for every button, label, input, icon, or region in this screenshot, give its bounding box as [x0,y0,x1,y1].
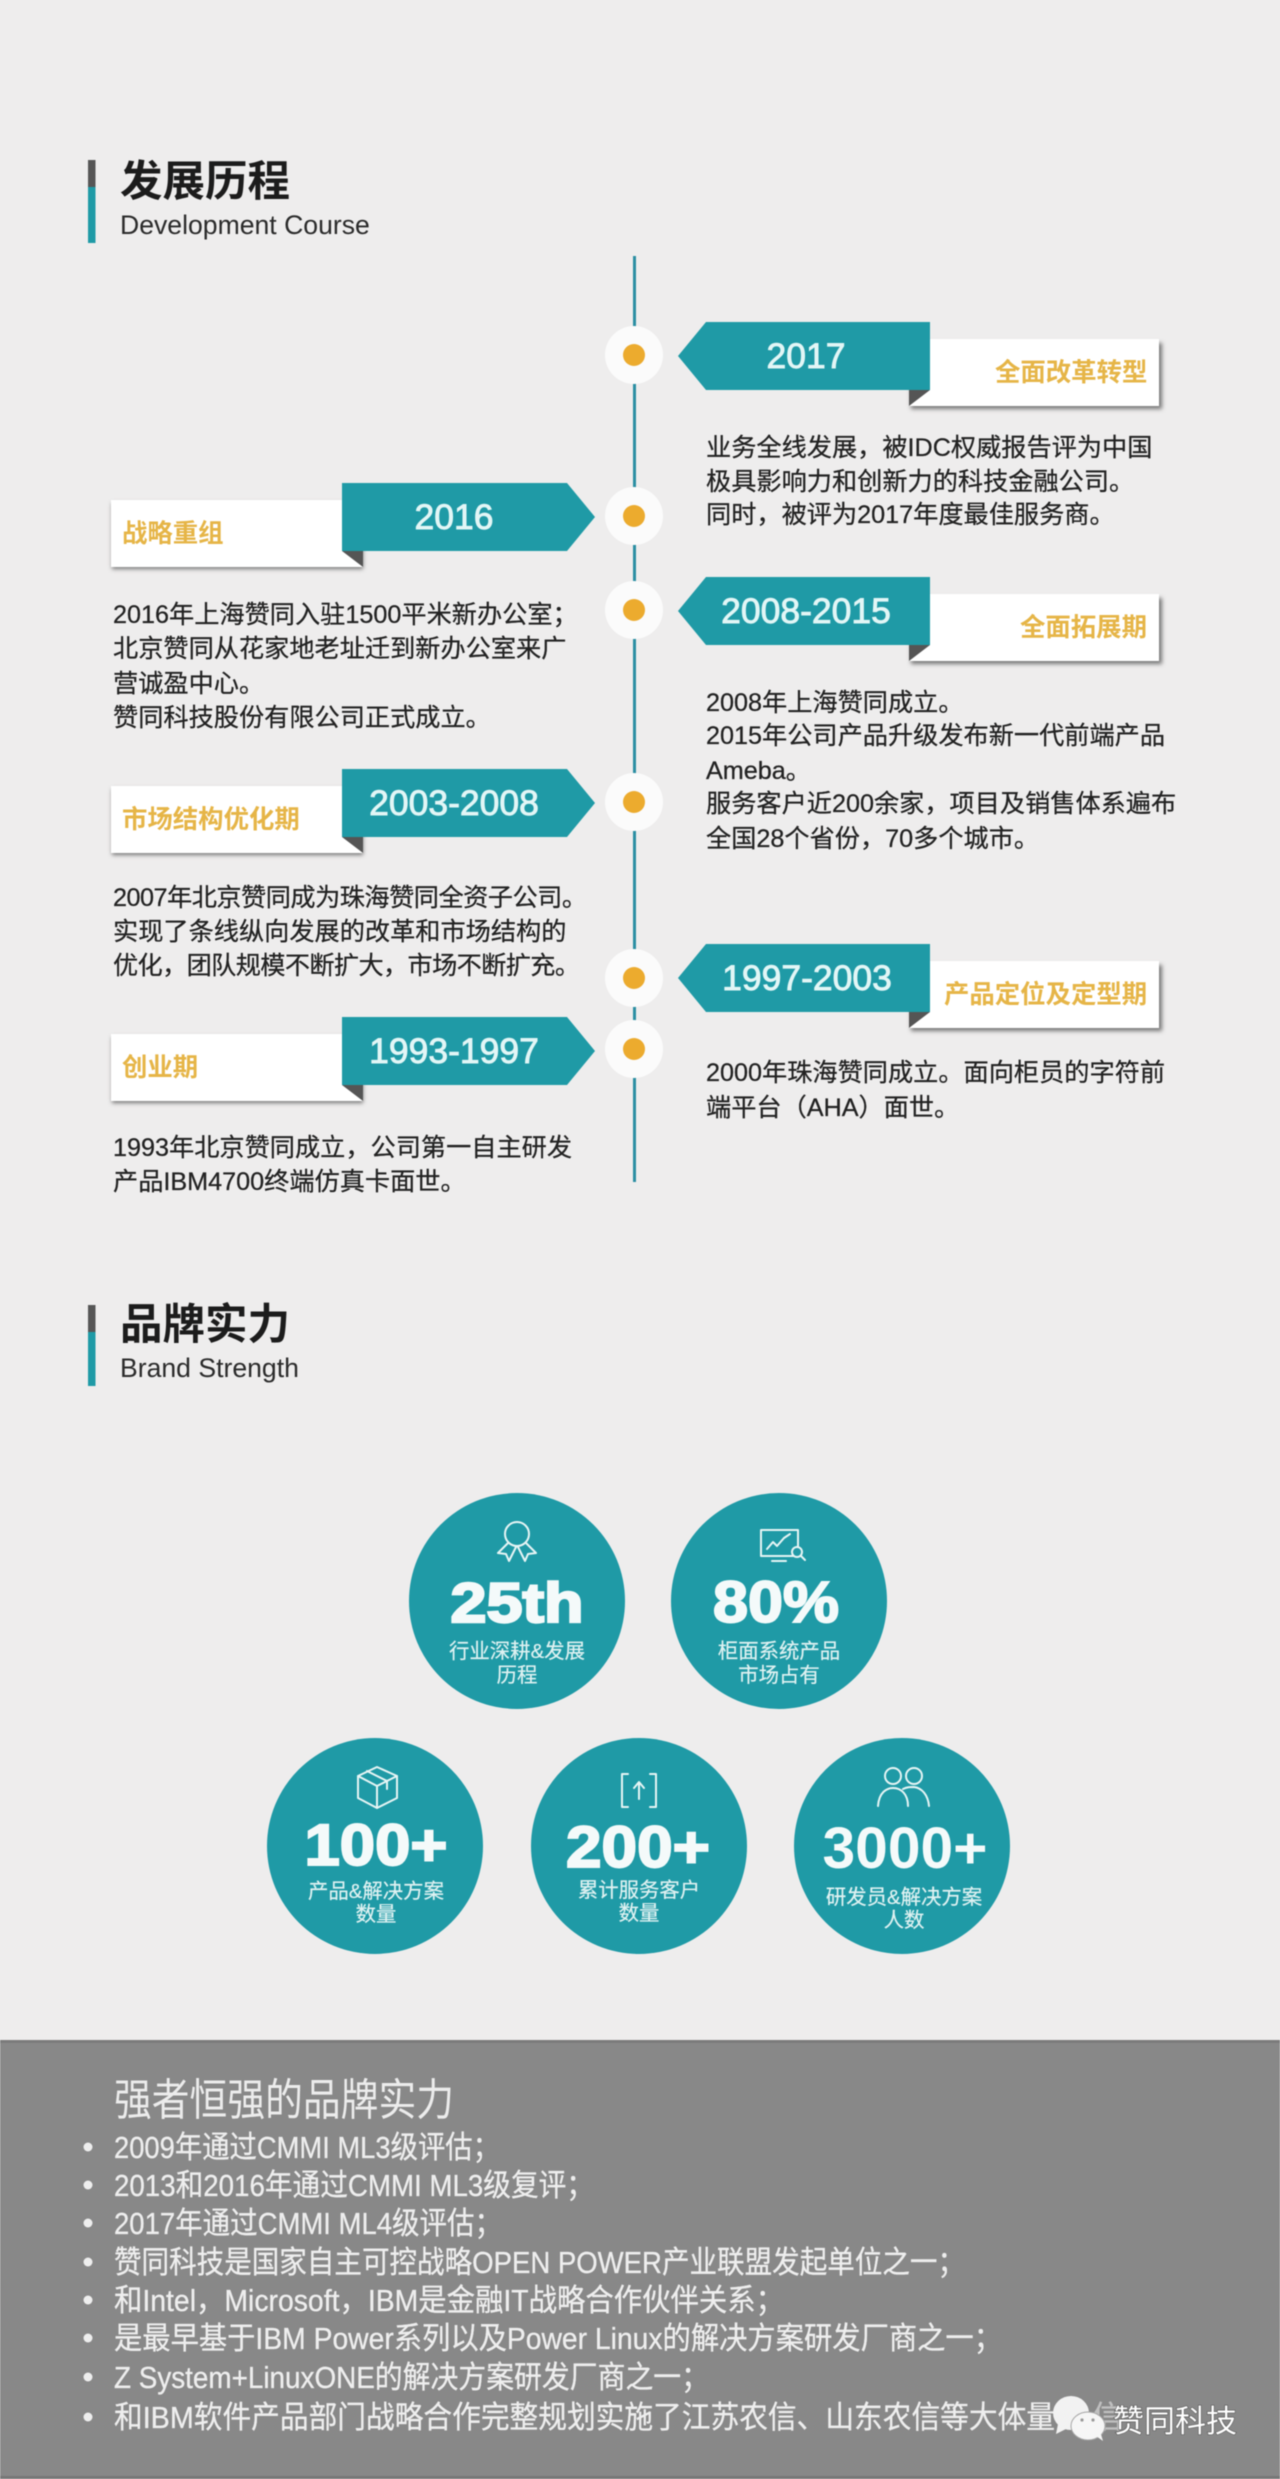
heading: 品牌实力: 品牌实力 [120,1302,290,1349]
text: 1993-1997 description: 1993年北京赞同成立，公司第一自主研发 [113,1134,572,1162]
ribbon: 2008-2015 全面拓展期: 2008-2015 [721,591,891,631]
heading: 发展历程 [88,159,370,243]
stat circle: 100+ [267,1738,483,1954]
ribbon: 1997-2003 产品定位及定型期: 产品定位及定型期 [944,980,1147,1009]
stat circle: 3000+: 3000+ [822,1816,988,1881]
text: 1997-2003 description [706,1059,1165,1122]
stat circle: 3000+: 研发员&解决方案 [826,1886,982,1909]
text: 2017 description [706,434,1152,529]
text: 2008-2015 description: 服务客户近200余家，项目及销售体系遍布 [706,790,1176,818]
text: 2016 description: 2016年上海赞同入驻1500平米新办公室； [113,601,578,629]
timeline node 1997-2003 [605,949,663,1007]
stat circle: 200+: 200+ [566,1815,710,1880]
list items: Z System+LinuxONE的解决方案研发厂商之一； [114,2360,709,2395]
ribbon: 2017 全面改革转型: 全面改革转型 [995,359,1147,387]
timeline axis [633,256,636,1182]
icon: monitor chart with magnifier [761,1530,805,1561]
ribbon: 1997-2003 产品定位及定型期: 1997-2003 [722,958,892,998]
list items: 2017年通过CMMI ML4级评估； [114,2206,502,2241]
text: 2017 description: 极具影响力和创新力的科技金融公司。 [706,468,1134,496]
heading: 发展历程: Development Course [120,210,370,240]
text: 2003-2008 description: 优化，团队规模不断扩大，市场不断扩充。 [113,952,580,980]
stat circle: 100+: 产品&解决方案 [308,1880,444,1903]
icon: upload bracket [622,1774,656,1807]
ribbon: 2003-2008 市场结构优化期: 2003-2008 [369,783,539,823]
stat circle: 80%: 市场占有 [738,1664,820,1687]
ribbon: 1993-1997 创业期 [111,1017,595,1103]
ribbon: 1993-1997 创业期: 1993-1997 [369,1031,539,1071]
stat circle: 80%: 柜面系统产品 [718,1640,840,1663]
stat circle: 200+: 累计服务客户 [578,1879,700,1902]
text: 1997-2003 description: 2000年珠海赞同成立。面向柜员的字符前 [706,1059,1165,1087]
text: 1993-1997 description: 产品IBM4700终端仿真卡面世。 [113,1168,466,1196]
icon: medal [498,1522,536,1561]
text: 2016 description: 营诚盈中心。 [113,670,264,698]
text: 2008-2015 description: Ameba。 [706,757,811,785]
stat circle: 3000+ [794,1738,1010,1954]
list items: 信 [1092,2400,1123,2435]
list items: 赞同科技是国家自主可控战略OPEN POWER产业联盟发起单位之一； [114,2245,965,2280]
text: 2016 description: 北京赞同从花家地老址迁到新办公室来广 [113,635,566,663]
text: 2008-2015 description [706,689,1176,853]
timeline node 2017 [605,326,663,384]
ribbon: 2017 全面改革转型 [678,322,1162,409]
timeline node 1993-1997 [605,1020,663,1078]
ribbon: 2016 战略重组 [111,483,595,569]
stat circle: 25th [409,1493,625,1709]
list items [84,2130,1123,2435]
ribbon: 2003-2008 市场结构优化期: 市场结构优化期 [122,806,300,834]
stat circle: 25th: 历程 [497,1664,537,1687]
heading: 品牌实力 [88,1302,299,1386]
icon: people [878,1768,929,1806]
list items: 2009年通过CMMI ML3级评估； [114,2130,500,2165]
panel title: 强者恒强的品牌实力 [114,2076,454,2125]
stat circle: 200+: 数量 [619,1902,659,1925]
panel: brand strength list [0,2040,1280,2479]
text: 2017 description: 同时，被评为2017年度最佳服务商。 [706,501,1115,529]
stat circle: 3000+: 人数 [884,1909,924,1932]
text: 2008-2015 description: 2008年上海赞同成立。 [706,689,964,717]
list items: 是最早基于IBM Power系列以及Power Linux的解决方案研发厂商之一； [114,2321,1002,2356]
text: 1997-2003 description: 端平台（AHA）面世。 [706,1094,959,1122]
stat circle: 100+: 数量 [356,1903,396,1926]
text: 1993-1997 description [113,1134,572,1196]
ribbon: 2008-2015 全面拓展期: 全面拓展期 [1020,614,1147,642]
watermark: wechat logo and name [1053,2396,1237,2441]
text: 2008-2015 description: 2015年公司产品升级发布新一代前端产品 [706,722,1165,750]
text: 2003-2008 description: 实现了条线纵向发展的改革和市场结构的 [113,918,566,946]
ribbon: 2016 战略重组: 战略重组 [122,520,224,548]
timeline node 2008-2015 [605,581,663,639]
text: 2016 description [113,601,578,732]
text: 2003-2008 description [113,884,587,980]
list items: 和IBM软件产品部门战略合作完整规划实施了江苏农信、山东农信等大体量 [114,2400,1055,2435]
icon: box [358,1767,397,1808]
ribbon: 1997-2003 产品定位及定型期 [678,944,1162,1031]
stat circle: 80%: 80% [713,1570,839,1635]
stat circle: 25th: 25th [450,1571,584,1634]
watermark: wechat logo and name: 赞同科技 [1113,2404,1237,2439]
heading: 品牌实力: Brand Strength [120,1353,299,1383]
list items: 2013和2016年通过CMMI ML3级复评； [114,2168,594,2203]
ribbon: 2017 全面改革转型: 2017 [767,336,845,376]
timeline node 2003-2008 [605,773,663,831]
ribbon: 2016 战略重组: 2016 [415,497,493,537]
ribbon: 2008-2015 全面拓展期 [678,577,1162,664]
text: 2003-2008 description: 2007年北京赞同成为珠海赞同全资子公司。 [113,884,587,912]
icon: wechat bubbles [1053,2396,1105,2441]
text: 2017 description: 业务全线发展，被IDC权威报告评为中国 [706,434,1152,462]
stat circle: 100+: 100+ [304,1813,448,1878]
text: 2008-2015 description: 全国28个省份，70多个城市。 [706,825,1039,853]
stat circle: 25th: 行业深耕&发展 [449,1640,585,1663]
ribbon: 1993-1997 创业期: 创业期 [122,1054,198,1082]
list items: 和Intel，Microsoft，IBM是金融IT战略合作伙伴关系； [114,2283,784,2318]
stat circle: 80% [671,1493,887,1709]
stat circle: 200+ [531,1738,747,1954]
text: 2016 description: 赞同科技股份有限公司正式成立。 [113,704,491,732]
timeline node 2016 [605,487,663,545]
heading: 发展历程: 发展历程 [120,159,290,206]
ribbon: 2003-2008 市场结构优化期 [111,769,595,855]
